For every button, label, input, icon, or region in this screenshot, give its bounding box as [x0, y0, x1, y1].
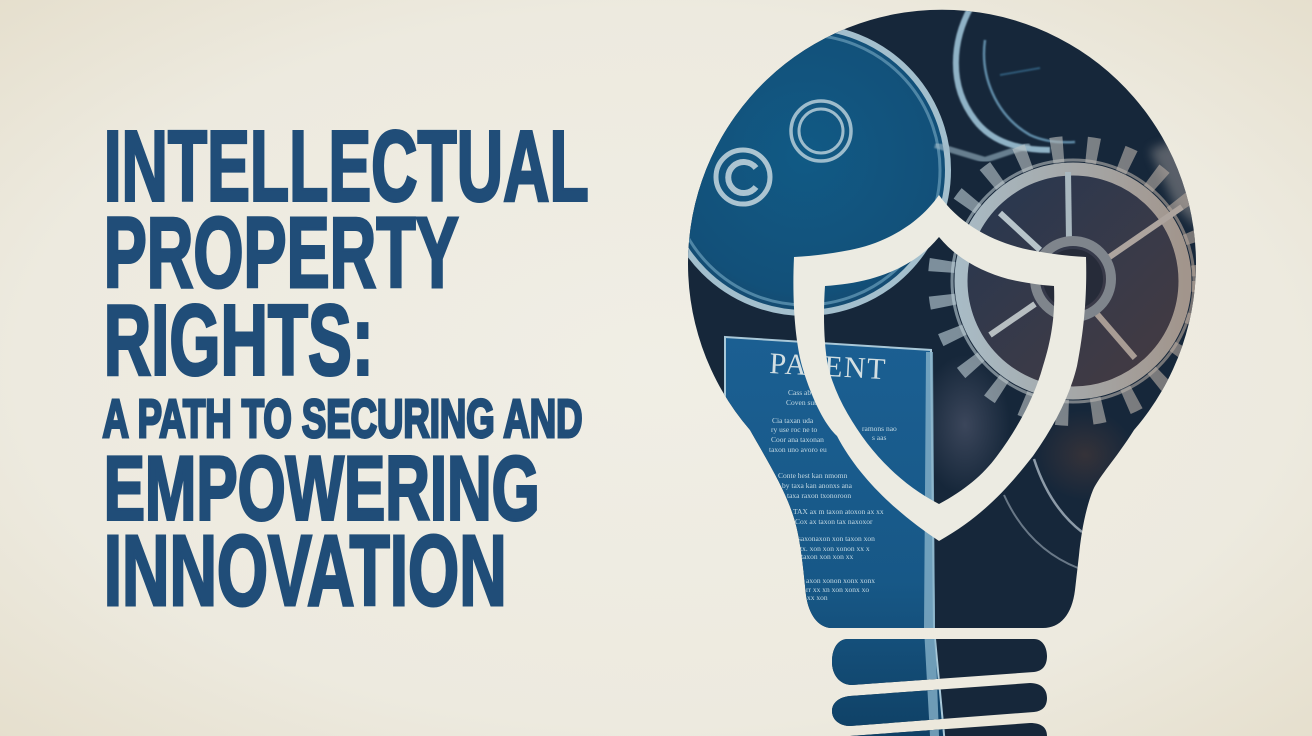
document heading: PATENT [769, 347, 886, 386]
document body text: taxon xon xon xx [801, 552, 854, 561]
document body text: taxon uno avoro eu [769, 445, 827, 454]
document body text: Conte hest kan nmomn [778, 471, 848, 480]
dark backdrop [680, 0, 1210, 736]
lower disc arcs [1004, 459, 1082, 568]
blue disc with copyright marks [662, 27, 948, 313]
document body text: TAX ax m taxon atoxon ax xx [793, 507, 884, 516]
document body text: rr xx xn xon xonx xo [806, 585, 869, 594]
document body text: by taxa kan anonxs ana [782, 481, 853, 490]
document body text: Cox ax taxon tax naxoxor [795, 517, 873, 526]
title line: Empowering: EMPOWERING [104, 438, 540, 540]
title line: Property: PROPERTY [104, 197, 459, 309]
document body text: s aas [872, 433, 886, 442]
document body text: Coven sub noro [786, 398, 834, 407]
icon: copyright symbol [716, 150, 770, 204]
main gear [941, 149, 1205, 413]
title line: Innovation: INNOVATION [104, 515, 507, 627]
document body text: Cass ab proviso [788, 388, 836, 397]
document body text [769, 388, 897, 602]
wisps right of the gear [1148, 139, 1194, 229]
document body text: tx. xon xon xonon xx x [800, 544, 870, 553]
gear spokes [990, 172, 1182, 358]
document right edge strip [924, 352, 939, 736]
document body text: ry use roc ne to [771, 425, 817, 434]
document body text: saxonaxon xon taxon xon [798, 534, 875, 543]
gear hub [1043, 249, 1103, 309]
document body text: Coor ana taxonan [771, 435, 824, 444]
subtitle line: A path to securing and: A PATH TO SECURING AND [102, 389, 582, 449]
icon: double ring [791, 101, 851, 161]
title [102, 110, 589, 627]
document body text: taxa raxon txonoroon [787, 491, 851, 500]
brown glow [1048, 422, 1121, 488]
document body text: Cia taxan uda [772, 416, 814, 425]
shield [793, 195, 1086, 541]
patent document [725, 337, 945, 736]
lower shadow glow [934, 371, 1000, 480]
wispy junction between gears [935, 145, 1030, 160]
document body text: ramons nao [862, 424, 897, 433]
title line: Intellectual: INTELLECTUAL [104, 110, 589, 222]
title line: Rights: RIGHTS: [104, 284, 374, 396]
document body text: axon xonon xonx xonx [806, 576, 875, 585]
back gear ring top right [956, 5, 1075, 150]
light bulb collage [662, 0, 1210, 736]
document body text: xx xon [807, 593, 828, 602]
